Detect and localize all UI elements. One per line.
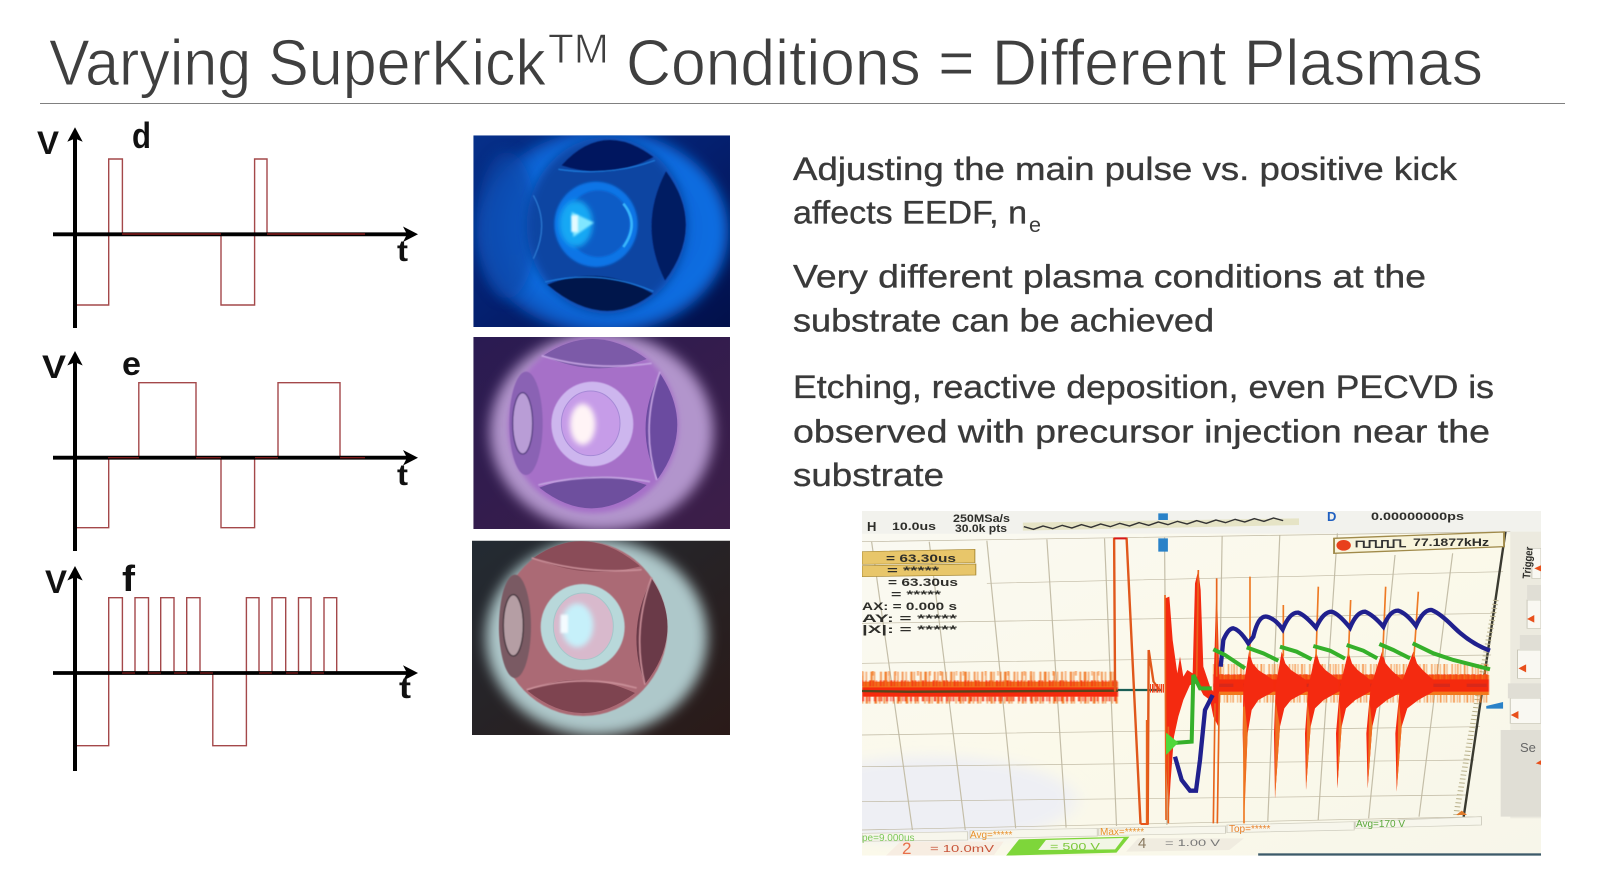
scope readouts: = 1.00 V <box>1165 838 1220 848</box>
waveform chart e: e <box>122 345 141 382</box>
photo: purple plasma <box>473 332 730 531</box>
text block: description: Very different plasma conditions at the <box>793 258 1426 294</box>
title <box>49 25 1483 99</box>
scope readouts: = 63.30us <box>886 553 956 565</box>
right controls <box>1510 532 1541 818</box>
pulse spikes <box>1243 652 1273 810</box>
text block: description: affects EEDF, n <box>793 194 1027 230</box>
scope readouts: 30.0k pts <box>955 523 1007 535</box>
text block: description: substrate <box>793 457 944 493</box>
waveform chart f <box>45 558 418 771</box>
chart: plasma pulse traces <box>1147 570 1490 823</box>
scope readouts: Avg=170 V <box>1356 819 1405 830</box>
header strip <box>862 511 1541 534</box>
scope readouts: = ***** <box>891 589 942 601</box>
grid <box>872 533 1453 830</box>
scope readouts: = 63.30us <box>888 577 958 589</box>
scope readouts: |X|: = ***** <box>862 624 958 636</box>
scope readouts: 4 <box>1138 835 1146 852</box>
scope readouts: AX: = 0.000 s <box>862 601 957 613</box>
scope readouts: H <box>867 519 876 534</box>
waveform chart e: t <box>397 459 408 492</box>
initial burst <box>1165 570 1219 820</box>
bottom status <box>862 817 1481 841</box>
measurement bars <box>862 549 976 577</box>
scope readouts: pe=9.000us <box>862 833 915 844</box>
title: Conditions = Different Plasmas <box>626 27 1483 99</box>
scope readouts: Trigger <box>1521 546 1536 579</box>
scope readouts: Top=***** <box>1229 824 1271 835</box>
scope readouts: D <box>1327 509 1336 524</box>
text block: description: e <box>1029 214 1041 237</box>
scope readouts: = 500 V <box>1050 842 1100 853</box>
text block: description: observed with precursor injection near the <box>793 414 1490 450</box>
title: Varying SuperKick <box>49 27 547 99</box>
waveform chart d: d <box>132 115 151 156</box>
text block: description: Adjusting the main pulse vs. positive kick <box>793 151 1458 187</box>
text block: description: substrate can be achieved <box>793 302 1214 338</box>
photo: pink plasma <box>472 539 730 736</box>
noise band left <box>862 673 1118 699</box>
title: TM <box>548 25 609 72</box>
orange noise band <box>1213 670 1489 698</box>
text block: description <box>793 151 1494 493</box>
waveform chart f: f <box>122 558 136 599</box>
waveform chart f: t <box>399 672 411 705</box>
scope readouts: Se <box>1520 740 1536 755</box>
scope readouts: AY: = ***** <box>862 613 958 625</box>
scope readouts: 77.1877kHz <box>1413 537 1490 549</box>
scope readouts: = 10.0mV <box>930 844 994 855</box>
scope readouts: 0.00000000ps <box>1371 511 1464 523</box>
waveform chart e: V <box>42 349 67 385</box>
main pulse <box>1114 538 1160 824</box>
waveform chart d: t <box>397 235 408 268</box>
text block: description: Etching, reactive deposition, even PECVD is <box>793 369 1494 405</box>
scope readouts: 2 <box>902 839 911 858</box>
waveform chart d: V <box>37 125 60 161</box>
photo: oscilloscope traces <box>862 511 1541 856</box>
blue trace <box>1175 610 1490 791</box>
waveform chart d <box>37 115 418 328</box>
green trace <box>1168 643 1490 743</box>
scope readouts: Avg=***** <box>970 830 1012 841</box>
scope readouts: 250MSa/s <box>953 513 1010 525</box>
waveform chart e <box>42 345 418 551</box>
scope readouts: = ***** <box>887 565 940 577</box>
photo: blue plasma <box>473 130 730 334</box>
scope readouts: 10.0us <box>892 521 936 533</box>
scope readouts <box>862 509 1536 858</box>
waveform chart f: V <box>45 564 68 600</box>
scope readouts: Max=***** <box>1100 827 1144 838</box>
